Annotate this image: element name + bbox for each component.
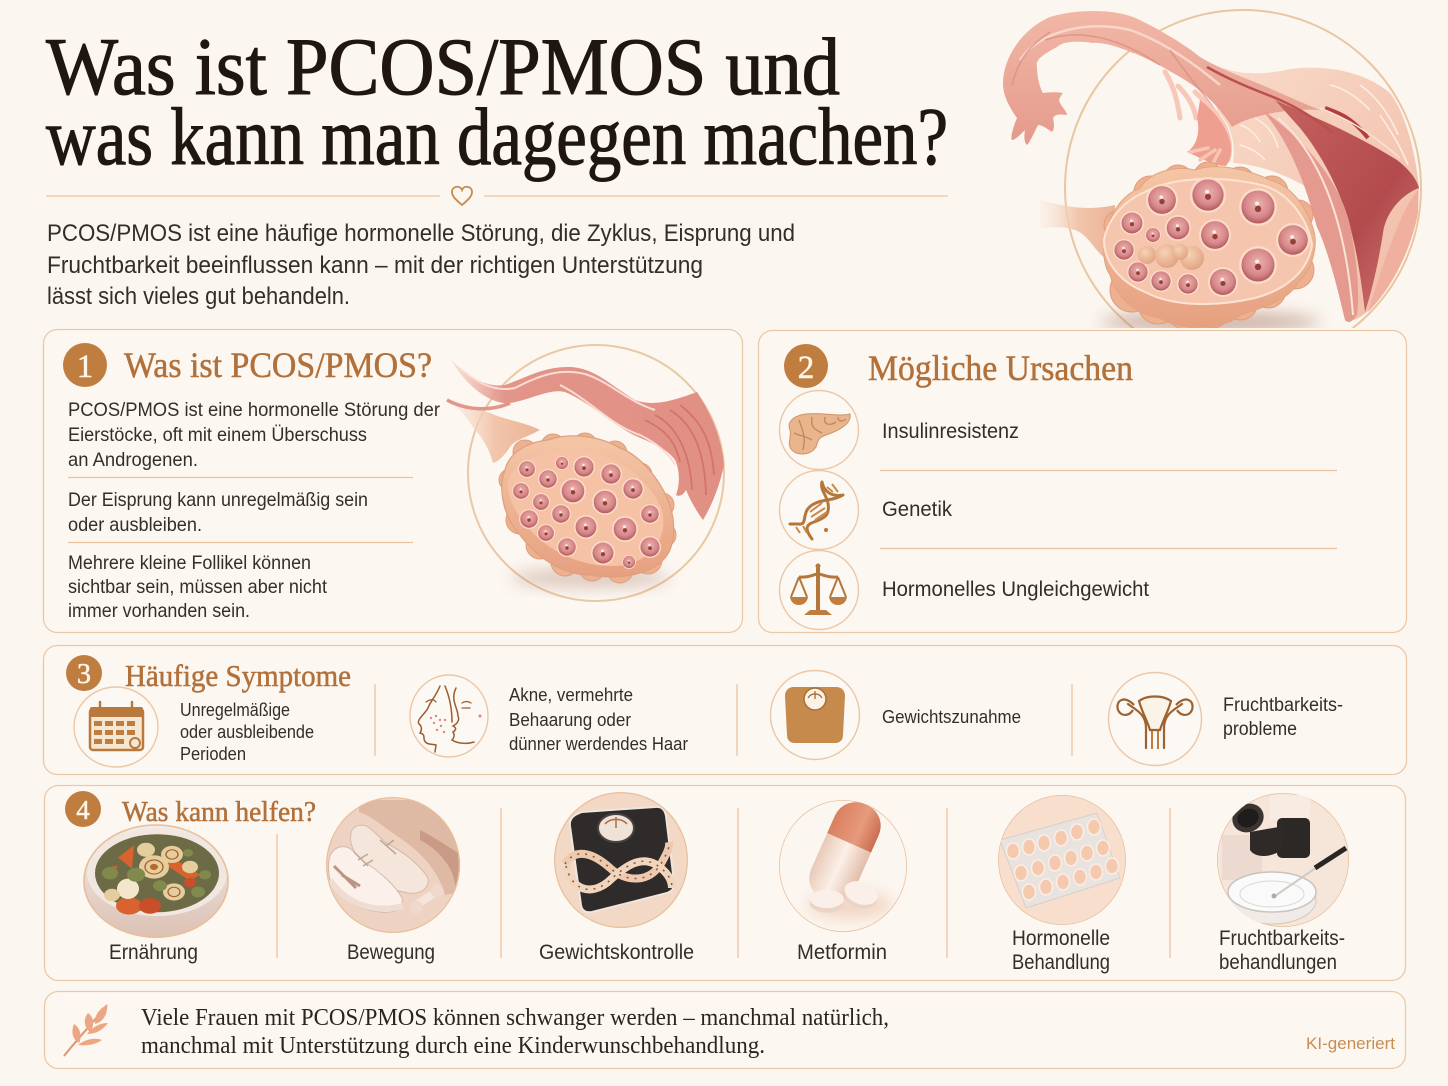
- photo: scale with measuring tape: [554, 792, 688, 928]
- photo: sneakers and yoga mat: [326, 797, 470, 933]
- icon: calendar: [74, 687, 158, 767]
- label: Perioden: Perioden: [180, 744, 246, 764]
- heart divider: [46, 187, 948, 205]
- body text 1: sichtbar sein, müssen aber nicht: [68, 576, 328, 598]
- intro text: Fruchtbarkeit beeinflussen kann – mit der richtigen Unterstützung: [47, 252, 703, 279]
- panel 4: Was kann helfen: [44, 786, 1406, 980]
- intro text: lässt sich vieles gut behandeln.: [47, 283, 350, 310]
- photo: blister pack: [998, 795, 1126, 925]
- title: was kann man dagegen machen?: [46, 91, 948, 182]
- label: Insulinresistenz: Insulinresistenz: [882, 420, 1019, 443]
- panel 2: Mögliche Ursachen: [758, 330, 1406, 632]
- badge 1: 1: [77, 349, 93, 385]
- label: Akne: dünner werdendes Haar: [509, 734, 688, 754]
- label: Fruchtbarkeitsprobleme: probleme: [1223, 719, 1297, 740]
- body text 1: Mehrere kleine Follikel können: [68, 552, 311, 574]
- closing text: Viele Frauen mit PCOS/PMOS können schwanger werden – manchmal natürlich,: [141, 1005, 889, 1031]
- badge 2: [784, 344, 828, 388]
- icon: balance scale: [780, 550, 858, 630]
- label: Hormonelle Behandlung: Behandlung: [1012, 951, 1110, 974]
- label: Ernährung: Ernährung: [109, 941, 198, 964]
- panel 3: Häufige Symptome: [44, 646, 1406, 774]
- badge 3: 3: [77, 659, 91, 690]
- heading 4: Was kann helfen?: [122, 796, 316, 828]
- icon: pancreas: [780, 390, 858, 470]
- label: Perioden: Unregelmäßige: [180, 700, 290, 720]
- body text 1: Der Eisprung kann unregelmäßig sein: [68, 489, 368, 511]
- heading 3: Häufige Symptome: [125, 658, 351, 693]
- icon: leaf sprig: [64, 1005, 108, 1056]
- panel 5: closing note: [44, 992, 1406, 1068]
- label: Akne: [509, 685, 688, 754]
- body text 1: PCOS/PMOS ist eine hormonelle Störung der: [68, 399, 440, 421]
- label: Fruchtbarkeitsbehandlungen: behandlungen: [1219, 951, 1337, 974]
- body text 1: an Androgenen.: [68, 449, 198, 471]
- closing text: [141, 1005, 889, 1059]
- photo: lab and petri dish: [1217, 793, 1349, 927]
- icon: uterus: [1108, 672, 1202, 766]
- photo: pills: [779, 795, 907, 932]
- label: Gewichtszunahme: Gewichtszunahme: [882, 707, 1021, 727]
- panel 1: Was ist PCOS/PMOS: [44, 330, 742, 632]
- body text 1: Eierstöcke, oft mit einem Überschuss: [68, 424, 367, 446]
- closing text: manchmal mit Unterstützung durch eine Kinderwunschbehandlung.: [141, 1033, 765, 1059]
- ovary shadow: [1100, 312, 1320, 332]
- label: Gewichtskontrolle: Gewichtskontrolle: [539, 941, 694, 964]
- body text 1: [68, 399, 440, 622]
- icon: faces with acne: [410, 675, 488, 757]
- intro text: [47, 220, 795, 310]
- label: Perioden: [180, 700, 314, 764]
- heading 1: Was ist PCOS/PMOS?: [124, 345, 432, 385]
- label: Metformin: Metformin: [797, 941, 887, 964]
- label: Akne: Akne, vermehrte: [509, 685, 633, 705]
- left ovarian stalk: [1042, 201, 1115, 257]
- badge 3: [66, 655, 102, 691]
- label: Bewegung: Bewegung: [347, 941, 435, 964]
- icon: bathroom scale: [770, 670, 860, 760]
- label: Hormonelles Ungleichgewicht: Hormonelles Ungleichgewicht: [882, 578, 1149, 601]
- label: Hormonelle Behandlung: Hormonelle: [1012, 927, 1110, 950]
- illustration: ovary with follicles: [447, 345, 724, 601]
- label: Genetik: Genetik: [882, 498, 952, 521]
- badge 1: [63, 343, 107, 387]
- body text 1: oder ausbleiben.: [68, 514, 202, 536]
- intro text: PCOS/PMOS ist eine häufige hormonelle Störung, die Zyklus, Eisprung und: [47, 220, 795, 247]
- badge 2: 2: [798, 350, 814, 386]
- title: Was ist PCOS/PMOS und: [46, 21, 840, 112]
- body text 1: immer vorhanden sein.: [68, 600, 250, 622]
- label: Akne: Behaarung oder: [509, 710, 631, 730]
- label: Fruchtbarkeitsprobleme: [1223, 695, 1343, 740]
- icon: DNA helix: [780, 470, 858, 550]
- badge 4: 4: [76, 795, 90, 825]
- label: Fruchtbarkeitsprobleme: Fruchtbarkeits-: [1223, 695, 1343, 716]
- hero illustration: uterus and ovary: [1003, 9, 1422, 328]
- heading 2: Mögliche Ursachen: [868, 348, 1133, 388]
- badge 4: [65, 791, 101, 827]
- label: KI-generiert: KI-generiert: [1306, 1034, 1395, 1053]
- label: Hormonelle Behandlung: [1012, 927, 1110, 974]
- title: [46, 21, 948, 182]
- ovary lumps: [1104, 162, 1314, 329]
- label: Perioden: oder ausbleibende: [180, 722, 314, 742]
- photo: food bowl: [82, 823, 230, 939]
- label: Fruchtbarkeitsbehandlungen: [1219, 927, 1345, 974]
- label: Fruchtbarkeitsbehandlungen: Fruchtbarkeits-: [1219, 927, 1345, 950]
